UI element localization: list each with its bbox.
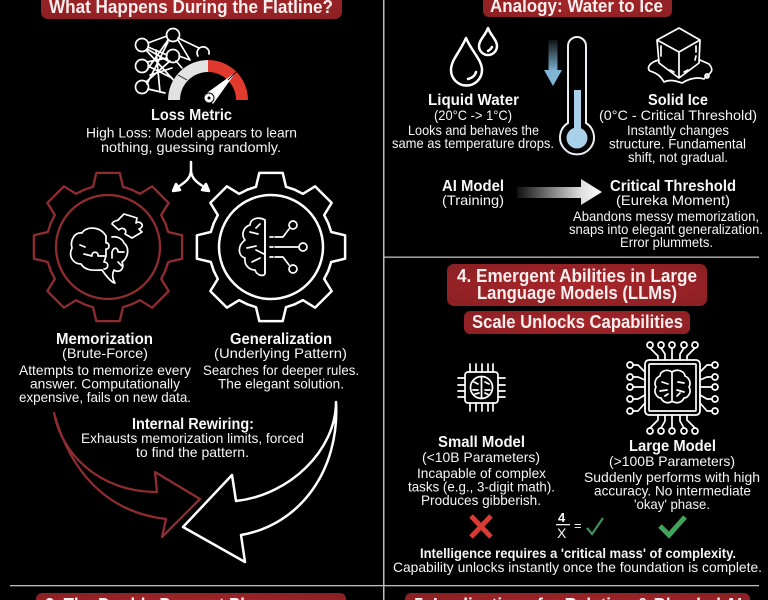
text: large model: Large Model — [629, 438, 716, 455]
text: solid ice: Solid Ice — [648, 92, 708, 109]
text: loss metric: nothing, guessing randomly. — [101, 140, 281, 155]
text: critical threshold: (Eureka Moment) — [616, 193, 730, 208]
text: liquid water — [392, 92, 554, 151]
text: liquid water: Looks and behaves the — [408, 123, 539, 138]
arrow: training to threshold — [517, 179, 602, 205]
icon: memorization gear — [34, 173, 182, 321]
text: critical threshold: Abandons messy memorization, — [573, 209, 759, 224]
text: small model: Incapable of complex — [417, 466, 546, 481]
text: large model: Suddenly performs with high — [584, 470, 760, 485]
text: memorization: Attempts to memorize every — [19, 363, 191, 378]
icon: green check — [660, 517, 685, 535]
arrow: red curved — [54, 413, 200, 537]
icon: large chip — [627, 342, 718, 434]
panel: emergent abilities in LLMs — [393, 264, 762, 575]
text: generalization: (Underlying Pattern) — [214, 346, 347, 361]
icon: generalization gear — [197, 173, 345, 321]
text: small model: Small Model — [438, 434, 525, 451]
arrow: white curved — [183, 402, 336, 562]
icon: water drops — [451, 28, 497, 86]
text: memorization: expensive, fails on new data. — [19, 390, 191, 405]
text: internal rewiring: Exhausts memorization limits, forced — [81, 431, 304, 446]
text: conclusion — [393, 546, 762, 575]
text: memorization: (Brute-Force) — [62, 346, 148, 361]
text: large model: 'okay' phase. — [634, 497, 710, 512]
text: ai model: AI Model — [442, 178, 504, 195]
text: ai model — [442, 178, 504, 208]
text: large model: accuracy. No intermediate — [594, 484, 751, 498]
icon: formula: = — [574, 518, 582, 533]
heading: emergent abilities: Language Models (LLMs) — [477, 282, 677, 303]
text: liquid water: same as temperature drops. — [392, 136, 554, 151]
text: conclusion: Capability unlocks instantly once the foundation is complete. — [393, 560, 762, 575]
text: solid ice — [599, 92, 757, 165]
text: memorization — [19, 331, 191, 405]
text: conclusion: Intelligence requires a 'critical mass' of complexity. — [420, 546, 736, 561]
text: solid ice: (0°C - Critical Threshold) — [599, 108, 757, 123]
text: critical threshold: Critical Threshold — [610, 178, 736, 195]
icon: small chip — [458, 364, 505, 411]
arrow: split — [173, 162, 209, 191]
icon: formula — [556, 510, 603, 541]
icon: formula: X — [557, 525, 567, 541]
text: solid ice: Instantly changes — [627, 123, 729, 138]
text: internal rewiring — [81, 416, 304, 460]
text: memorization: Memorization — [56, 331, 153, 348]
text: solid ice: structure. Fundamental — [609, 136, 746, 152]
text: critical threshold: Error plummets. — [620, 235, 713, 250]
text: large model: (>100B Parameters) — [609, 454, 735, 469]
text: generalization: Generalization — [230, 331, 332, 348]
heading: emergent abilities — [447, 264, 707, 306]
icon: formula: 4 — [558, 510, 566, 525]
arrow: cooling — [544, 40, 562, 86]
icon: ice cube — [648, 28, 712, 83]
text: small model: Produces gibberish. — [421, 493, 541, 508]
text: critical threshold — [569, 178, 763, 250]
text: solid ice: shift, not gradual. — [628, 150, 728, 165]
heading: emergent abilities: 4. Emergent Abilities in Large — [457, 265, 697, 286]
text: liquid water: Liquid Water — [428, 92, 519, 109]
text: generalization: The elegant solution. — [218, 376, 344, 392]
text: large model — [584, 438, 760, 512]
text: loss metric: High Loss: Model appears to learn — [86, 126, 297, 140]
icon: neural network — [136, 28, 209, 94]
subheading: scale unlocks capabilities: Scale Unlocks Capabilities — [472, 311, 683, 332]
text: loss metric — [86, 107, 297, 155]
panel: what happens during the flatline — [19, 0, 359, 562]
text: loss metric: Loss Metric — [151, 107, 232, 124]
text: ai model: (Training) — [442, 193, 504, 208]
text: liquid water: (20°C -> 1°C) — [434, 108, 512, 123]
icon: red cross — [471, 516, 491, 537]
text: internal rewiring: Internal Rewiring: — [132, 416, 254, 433]
text: small model — [408, 434, 555, 508]
text: generalization — [203, 331, 359, 392]
text: generalization: Searches for deeper rules. — [203, 363, 359, 378]
text: small model: tasks (e.g., 3-digit math). — [408, 480, 555, 494]
text: memorization: answer. Computationally — [30, 376, 180, 392]
text: internal rewiring: to find the pattern. — [136, 445, 249, 460]
icon: thermometer — [560, 37, 594, 154]
text: small model: (<10B Parameters) — [422, 450, 540, 465]
icon: loss gauge — [168, 60, 248, 104]
panel: analogy water to ice — [392, 0, 763, 250]
